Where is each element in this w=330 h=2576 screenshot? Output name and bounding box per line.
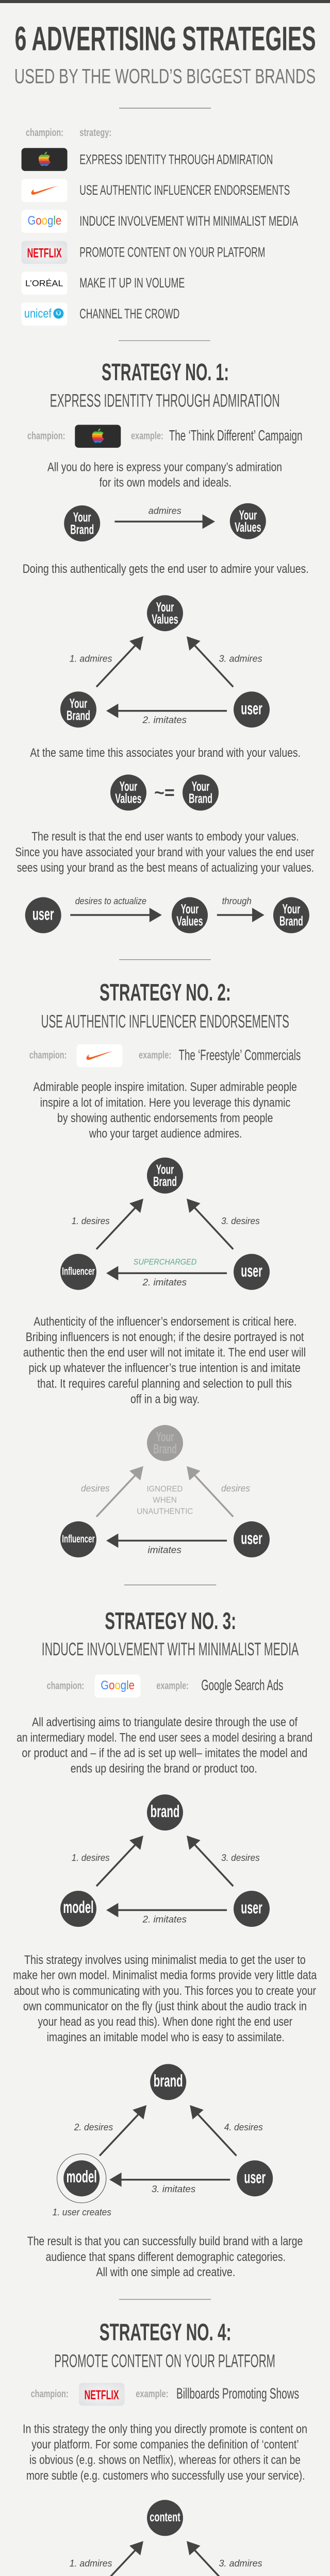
triangle diagram: ignored when unauthentic [60, 1425, 270, 1557]
strategy item 5: MAKE IT UP IN VOLUME [79, 275, 185, 291]
arrow: 2. desires [74, 2105, 146, 2156]
logo: Google [22, 210, 68, 233]
arrow: desires left, grey: desires [81, 1483, 110, 1494]
node: your brand: Your [70, 696, 87, 711]
node: model: model [63, 1897, 94, 1917]
logo: Netflix: NETFLIX [85, 2388, 119, 2402]
node: your values [172, 897, 208, 933]
arrow: 1. admires: 1. admires [70, 2558, 112, 2568]
node: user: user [241, 699, 262, 718]
node: influencer: Influencer [62, 1533, 95, 1545]
diagram: values equal brand [110, 774, 219, 810]
approx equal sign: ~= [154, 783, 175, 803]
arrow: through: through [222, 896, 252, 906]
node: user [234, 1521, 270, 1557]
paragraph [23, 2422, 307, 2483]
node: your values: Your [239, 507, 257, 522]
node: your brand: Your [192, 778, 209, 794]
triangle diagram: supercharged [60, 1158, 270, 1290]
arrow: desires to actualize: desires to actualize [75, 896, 146, 906]
node: brand: brand [151, 1802, 179, 1821]
paragraph: for its own models and ideals. [100, 476, 232, 489]
logo: Netflix [79, 2383, 125, 2406]
example label: example: [136, 2388, 168, 2400]
section: strategy 3 [13, 1607, 317, 2279]
node: your values: Values [235, 519, 261, 535]
arrow: 2. imitates [106, 1266, 227, 1287]
arrow: desires to actualize [70, 896, 162, 922]
node: your brand: Your [156, 1161, 174, 1177]
logo: Google: Google [27, 214, 61, 228]
arrow: 3. desires: 3. desires [221, 1216, 260, 1226]
node: your values [110, 774, 146, 810]
node: user [237, 2160, 273, 2196]
diagram: user flow [25, 896, 309, 933]
callout: supercharged: SUPERCHARGED [134, 1258, 197, 1267]
champion label: champion: [27, 431, 65, 442]
node: your brand: Your [283, 901, 300, 917]
logo: L'Oreal [22, 272, 68, 295]
arrow: imitates [106, 1533, 227, 1555]
node: your brand: Brand [67, 707, 90, 723]
section: strategy 4 [18, 2319, 312, 2576]
node: user [25, 897, 61, 933]
node: your values: Values [115, 791, 142, 806]
logo: Apple [75, 425, 121, 448]
triangle diagram [60, 1794, 270, 1927]
node: your brand: Your [73, 510, 91, 525]
node: content: content [150, 2510, 180, 2524]
logo: Unicef [22, 303, 68, 326]
paragraph: ends up desiring the brand or product too. [71, 1761, 257, 1775]
node: your brand [147, 1158, 183, 1194]
paragraph [33, 1080, 297, 1141]
node: your brand: Brand [70, 521, 94, 537]
arrow: 1. desires [72, 1836, 143, 1886]
heading: STRATEGY NO. 3: [105, 1607, 236, 1634]
paragraph: by showing authentic endorsements from people [57, 1111, 273, 1125]
paragraph: who your target audience admires. [89, 1127, 242, 1141]
arrow: 1. admires [70, 636, 143, 687]
paragraph [16, 1715, 312, 1775]
arrow: 3. imitates [109, 2173, 230, 2194]
node: user: user [241, 1261, 262, 1280]
node: your brand [273, 897, 309, 933]
paragraph [15, 830, 314, 875]
node: model with imagined ring [57, 2154, 106, 2203]
paragraph [23, 1315, 306, 1406]
arrow: 1. desires: 1. desires [72, 1853, 110, 1863]
arrow: 2. imitates [106, 1903, 227, 1925]
label: 1. user creates: 1. user creates [53, 2207, 111, 2217]
triangle diagram [60, 595, 270, 727]
logo: Google [95, 1674, 140, 1698]
node: user: user [241, 1529, 262, 1548]
logo: L'Oreal: L’ORÉAL [25, 279, 63, 289]
triangle diagram: user-created model [53, 2064, 273, 2217]
section: strategy 1 [15, 359, 314, 933]
logo: Apple [22, 148, 68, 171]
node: user: user [241, 1898, 262, 1917]
arrow: desires right, grey [187, 1466, 250, 1517]
node: your values: Values [152, 611, 178, 626]
arrow: 3. desires: 3. desires [221, 1853, 260, 1863]
arrow: 1. desires: 1. desires [72, 1216, 110, 1226]
node: brand [150, 2064, 186, 2100]
node: your brand, grey: Brand [153, 1441, 177, 1456]
node: your values: Your [181, 901, 199, 917]
arrow: 1. desires [72, 1198, 143, 1249]
arrow: 3. desires [187, 1836, 260, 1886]
arrow: 3. admires [187, 636, 262, 687]
triangle diagram [60, 2500, 270, 2576]
callout: ignored when unauthentic: IGNORED [146, 1485, 183, 1494]
arrow: 1. admires [70, 2541, 143, 2576]
arrow: 3. admires: 3. admires [219, 653, 262, 664]
logo: Netflix [22, 241, 68, 264]
arrow: desires right, grey: desires [221, 1483, 250, 1494]
arrow: 2. imitates: 2. imitates [142, 1277, 187, 1287]
logo: Unicef: unicef [24, 307, 52, 320]
arrow: through [217, 896, 265, 922]
node: your brand, grey: Your [156, 1429, 174, 1445]
node: influencer [60, 1254, 96, 1290]
node: model with imagined ring: model [67, 2167, 97, 2186]
arrow: 3. desires [187, 1198, 260, 1249]
heading: STRATEGY NO. 4: [100, 2319, 232, 2346]
arrow: 3. imitates: 3. imitates [152, 2184, 195, 2194]
node: user: user [244, 2167, 266, 2187]
champion label: champion: [47, 1681, 84, 1692]
logo: Netflix: NETFLIX [27, 246, 62, 261]
logo: Nike [77, 1044, 123, 1067]
node: your values [147, 595, 183, 631]
paragraph [13, 1953, 317, 2044]
arrow: admires: admires [148, 505, 182, 516]
node: your brand [183, 774, 219, 810]
example text: Google Search Ads [201, 1677, 283, 1694]
node: your brand [60, 691, 96, 727]
arrow: 2. imitates: 2. imitates [142, 1914, 187, 1925]
arrow: 2. imitates: 2. imitates [142, 715, 187, 725]
champion label: champion: [29, 1050, 67, 1061]
logo: Nike [22, 179, 68, 202]
node: model [60, 1891, 96, 1927]
example label: example: [156, 1681, 189, 1692]
paragraph: off in a big way. [130, 1392, 200, 1406]
callout: ignored when unauthentic: UNAUTHENTIC [137, 1507, 193, 1516]
arrow: imitates: imitates [147, 1545, 182, 1555]
example label: example: [131, 431, 163, 442]
node: your brand: Brand [189, 791, 212, 806]
node: influencer: Influencer [62, 1266, 95, 1278]
node: your brand: Brand [279, 913, 303, 929]
column label: strategy: strategy: [79, 127, 111, 139]
node: user [234, 691, 270, 727]
node: your values: Values [176, 913, 203, 929]
top bar [0, 0, 330, 3]
paragraph [27, 2234, 303, 2279]
arrow: admires [114, 505, 215, 529]
node: your values: Your [120, 778, 137, 794]
node: your brand, grey [147, 1425, 183, 1461]
node: your values [230, 503, 266, 539]
arrow: 3. admires [187, 2541, 262, 2576]
arrow: 1. admires: 1. admires [70, 653, 112, 664]
arrow: desires left, grey [81, 1466, 143, 1517]
node: influencer [60, 1521, 96, 1557]
header section [14, 19, 316, 326]
arrow: 3. admires: 3. admires [219, 2558, 262, 2568]
node: user [234, 1891, 270, 1927]
callout: ignored when unauthentic: WHEN [153, 1496, 177, 1505]
node: brand [147, 1794, 183, 1831]
paragraph: All with one simple ad creative. [96, 2265, 235, 2279]
heading: STRATEGY NO. 2: [100, 979, 231, 1006]
champion label: champion: [31, 2388, 69, 2400]
node: your brand [64, 505, 100, 541]
arrow: 4. desires: 4. desires [224, 2122, 263, 2132]
node: user [234, 1254, 270, 1290]
diagram: brand admires values [64, 503, 266, 541]
arrow: 2. imitates [106, 704, 227, 725]
column label: champion: champion: [26, 127, 63, 139]
callout: ignored when unauthentic [137, 1485, 193, 1516]
section: strategy 2 [23, 979, 306, 1557]
logo: Google: Google [101, 1679, 135, 1692]
node: your values: Your [156, 599, 174, 615]
strategy item 6: CHANNEL THE CROWD [79, 306, 179, 321]
node: content [147, 2500, 183, 2536]
node: user: user [32, 905, 54, 924]
node: your brand: Brand [153, 1174, 177, 1189]
heading: STRATEGY NO. 1: [102, 359, 229, 385]
arrow: 2. desires: 2. desires [74, 2122, 113, 2132]
example label: example: [139, 1050, 171, 1061]
arrow: 4. desires [190, 2105, 263, 2156]
node: brand: brand [154, 2071, 183, 2090]
paragraph [47, 461, 282, 489]
